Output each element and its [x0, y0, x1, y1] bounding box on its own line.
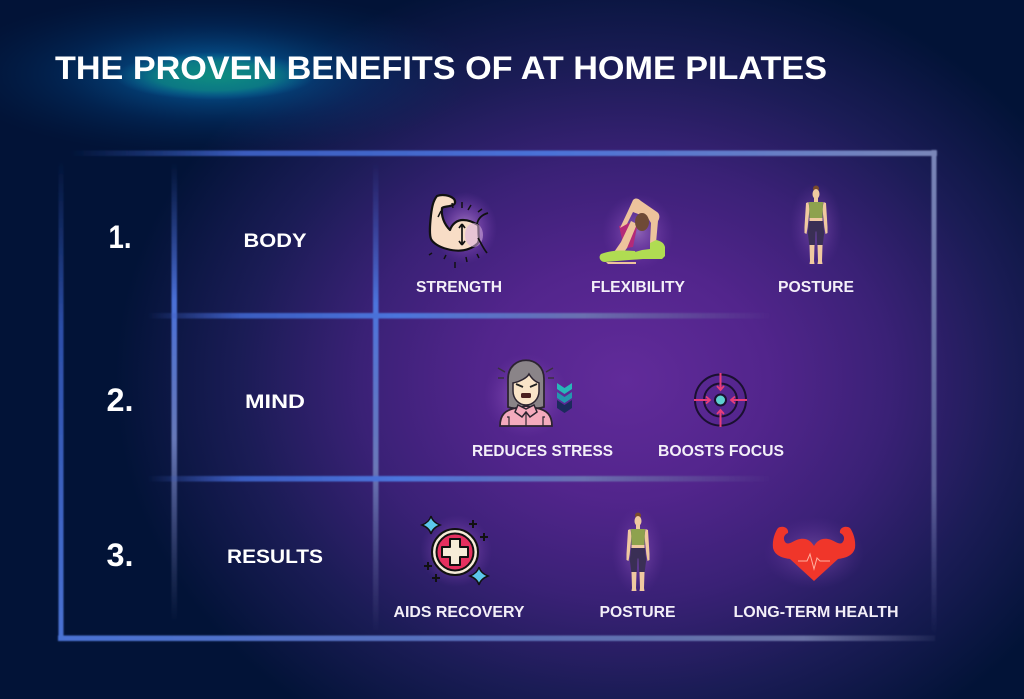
title: THE PROVEN BENEFITS OF AT HOME PILATES: [55, 50, 827, 86]
icon: strength: [429, 192, 497, 268]
icon: flexibility: [600, 194, 674, 270]
row 1 number: 1.: [108, 219, 132, 255]
row 3 number: 3.: [106, 537, 134, 573]
icon: long-term health: [764, 517, 864, 589]
title glow: [0, 0, 480, 156]
row 2 number: 2.: [106, 382, 134, 418]
label: flexibility: FLEXIBILITY: [591, 279, 686, 296]
icon: aids recovery: [420, 515, 492, 587]
icon: down chevrons: [557, 383, 572, 413]
label: long-term health: LONG-TERM HEALTH: [734, 604, 898, 621]
row 2 category: mind: MIND: [245, 392, 305, 413]
label: strength: STRENGTH: [416, 279, 502, 296]
label: posture (body): POSTURE: [778, 279, 854, 296]
table grid: [58, 150, 937, 641]
icon: posture (body): [790, 182, 842, 270]
label: reduces stress: REDUCES STRESS: [472, 443, 613, 460]
label: boosts focus: BOOSTS FOCUS: [658, 443, 784, 460]
label: aids recovery: AIDS RECOVERY: [394, 604, 525, 621]
icon: focus target: [694, 373, 747, 427]
icon: posture (results): [612, 508, 664, 596]
row 3 category: results: RESULTS: [227, 547, 323, 568]
row 1 category: body: BODY: [244, 231, 307, 252]
icon: reduces stress: [484, 354, 568, 438]
label: posture (results): POSTURE: [600, 604, 676, 621]
